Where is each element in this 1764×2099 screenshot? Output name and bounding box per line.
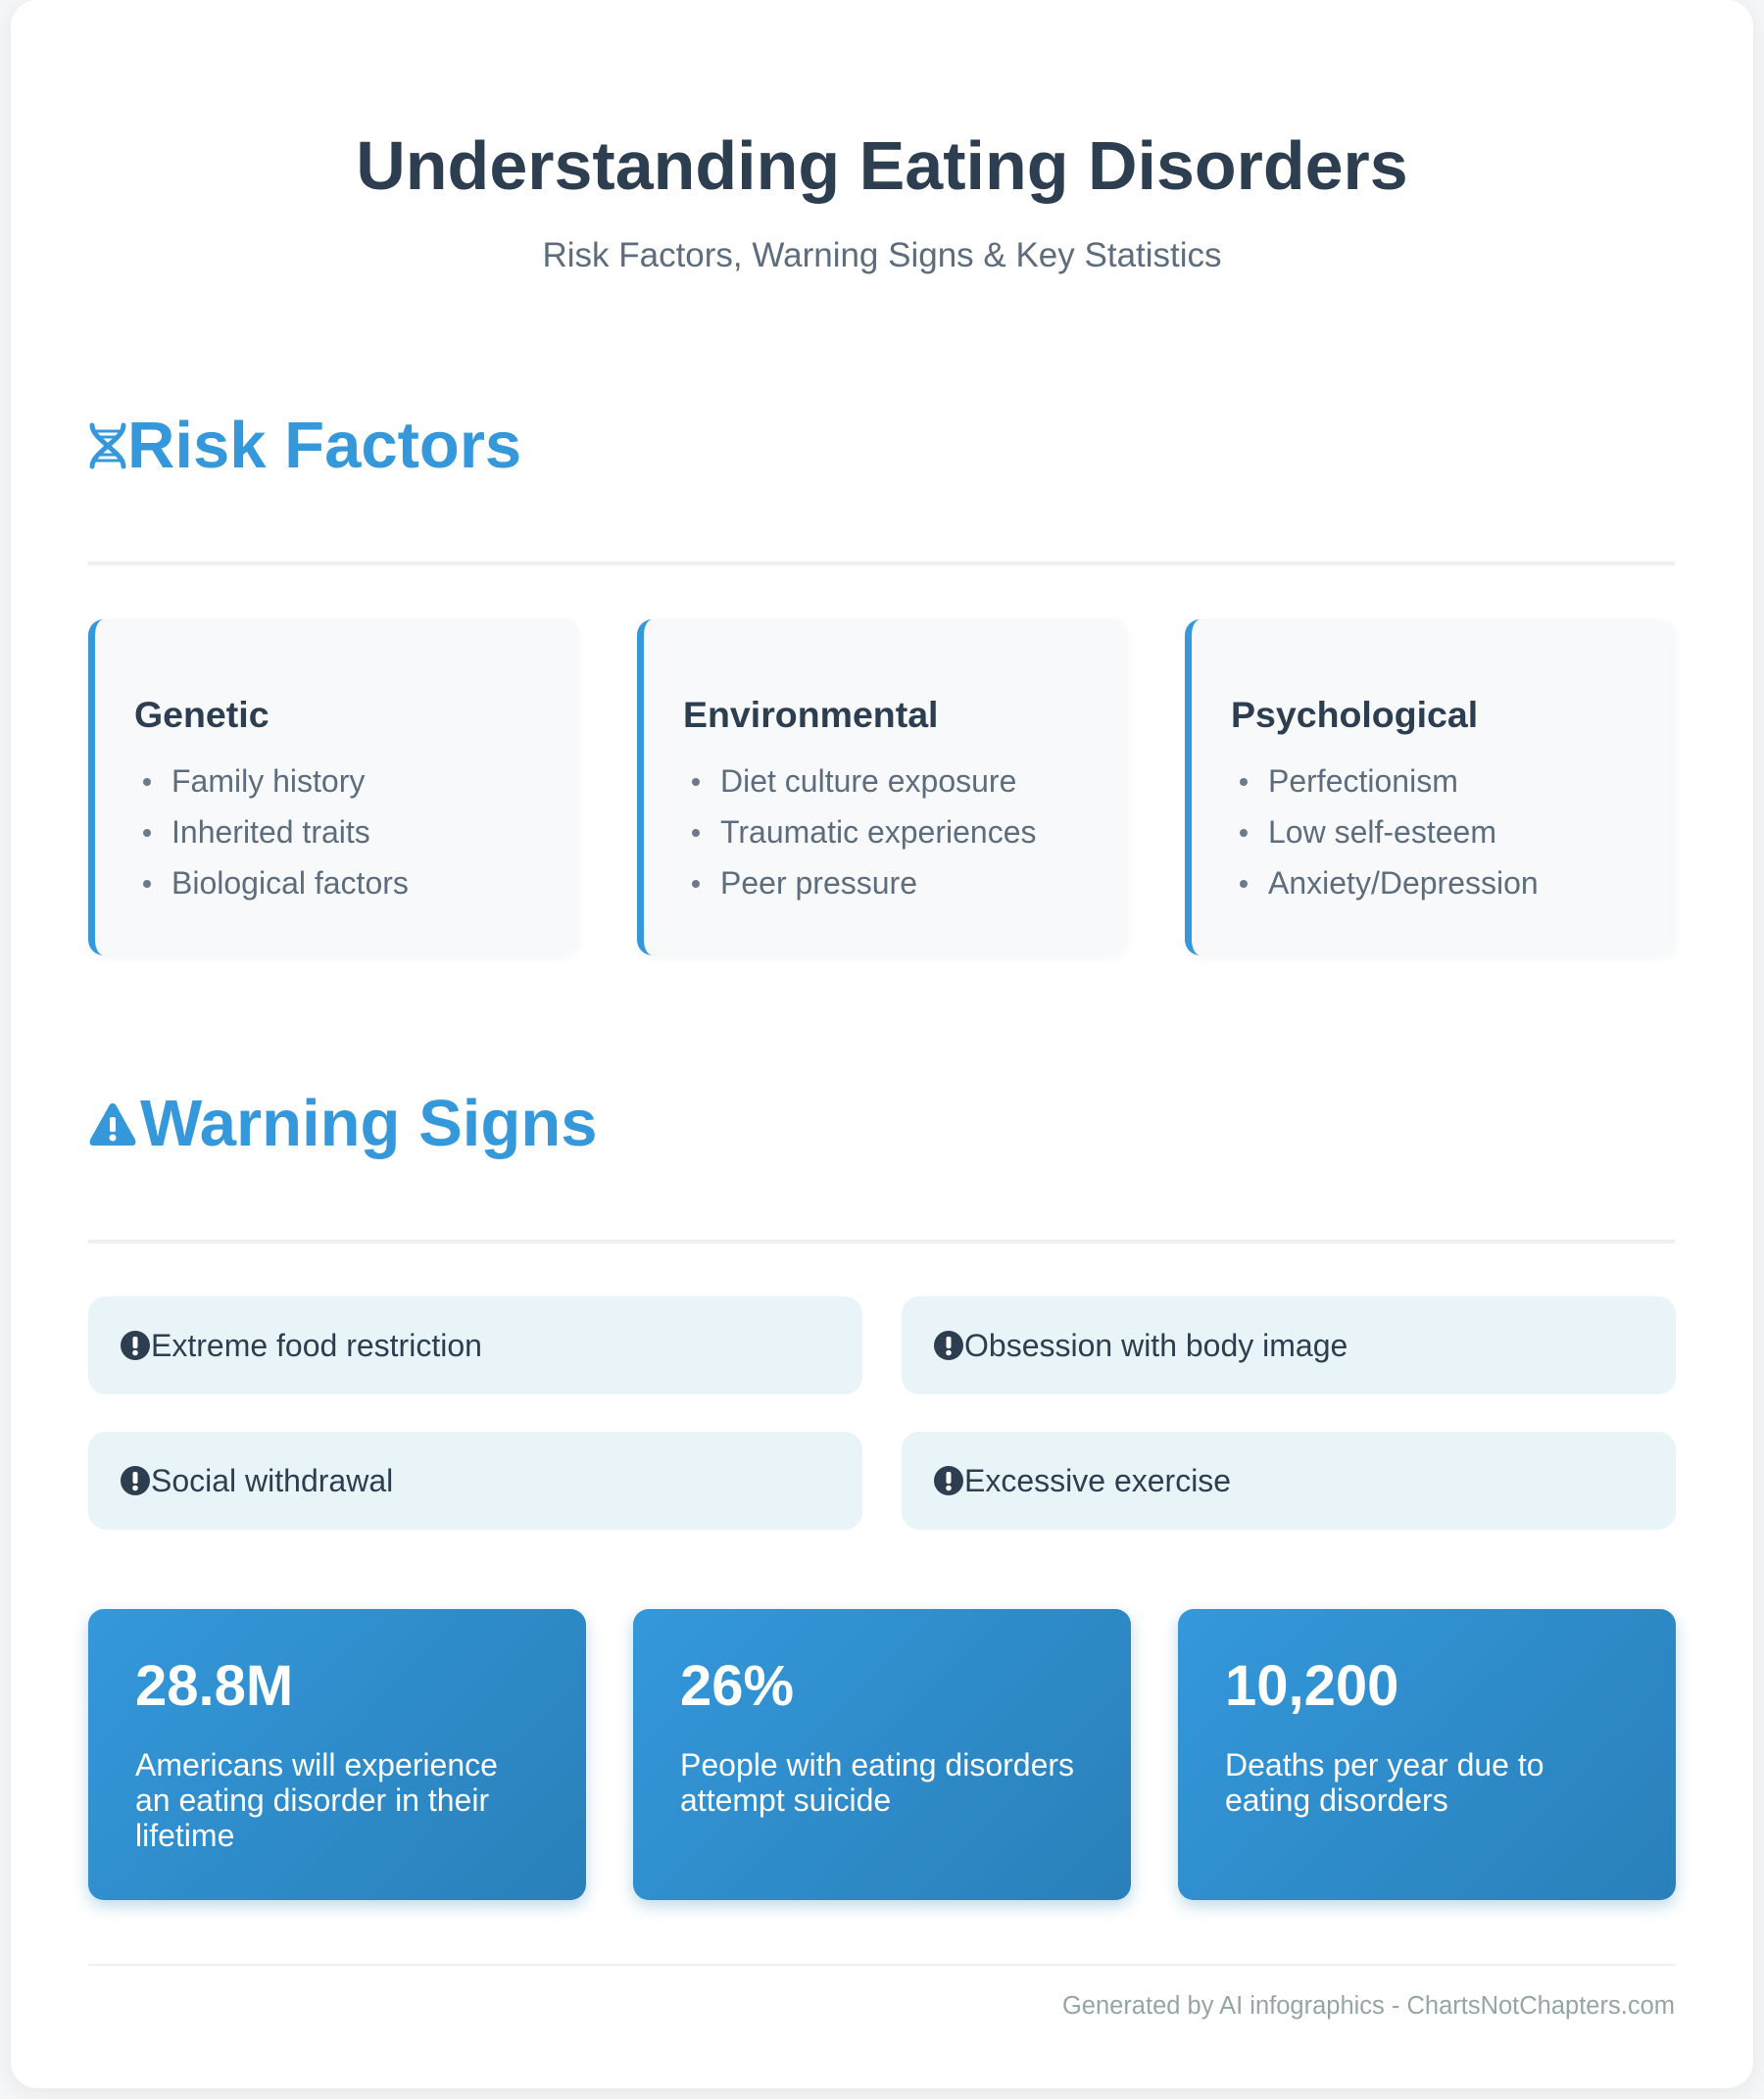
stat: 10,200: Deaths per year due to eating disorders xyxy=(1225,1747,1544,1818)
list: Diet culture exposure xyxy=(720,763,1016,799)
card title: Psychological xyxy=(1231,694,1478,735)
list: Family history xyxy=(172,763,365,799)
stat: 26% xyxy=(633,1609,1131,1900)
card title: Genetic xyxy=(134,694,270,735)
warning: social withdrawal xyxy=(88,1432,862,1530)
icon: warning triangle xyxy=(90,1103,135,1146)
panel: psychological xyxy=(1185,619,1676,955)
warning: body image: Obsession with body image xyxy=(964,1327,1348,1362)
stat: 28.8M: 28.8M xyxy=(135,1654,293,1718)
stat: 28.8M xyxy=(88,1609,586,1900)
warning: food restriction xyxy=(88,1296,862,1394)
list: Anxiety/Depression xyxy=(1268,865,1539,901)
list: Perfectionism xyxy=(1268,763,1458,799)
list: Inherited traits xyxy=(172,814,370,850)
list: Peer pressure xyxy=(720,865,917,901)
warning: social withdrawal: Social withdrawal xyxy=(151,1462,393,1497)
list: Traumatic experiences xyxy=(720,814,1037,850)
warning: body image xyxy=(902,1296,1676,1394)
stat: 26%: People with eating disorders attempt suicide xyxy=(680,1747,1074,1818)
stat: 10,200 xyxy=(1178,1609,1676,1900)
panel: genetic xyxy=(88,619,579,955)
heading: risk factors: Risk Factors xyxy=(127,409,521,482)
icon: dna xyxy=(90,423,125,468)
list: Low self-esteem xyxy=(1268,814,1496,850)
list: Biological factors xyxy=(172,865,409,901)
heading: warning signs: Warning Signs xyxy=(140,1087,598,1160)
card title: Environmental xyxy=(683,694,938,735)
warning: excessive exercise: Excessive exercise xyxy=(964,1462,1231,1497)
warning: excessive exercise xyxy=(902,1432,1676,1530)
title: Understanding Eating Disorders xyxy=(356,127,1408,204)
panel: environmental xyxy=(637,619,1128,955)
footer: Generated by AI infographics - ChartsNotChapters.com xyxy=(1062,1992,1675,2020)
stat: 26%: 26% xyxy=(680,1654,794,1718)
list xyxy=(143,763,409,901)
warning: food restriction: Extreme food restriction xyxy=(151,1327,482,1362)
list xyxy=(692,763,1037,901)
list xyxy=(1240,763,1539,901)
stat: 10,200: 10,200 xyxy=(1225,1654,1398,1718)
subtitle: Risk Factors, Warning Signs & Key Statistics xyxy=(542,236,1222,274)
stat: 28.8M: Americans will experience an eating disorder in their lifetime xyxy=(135,1747,498,1853)
